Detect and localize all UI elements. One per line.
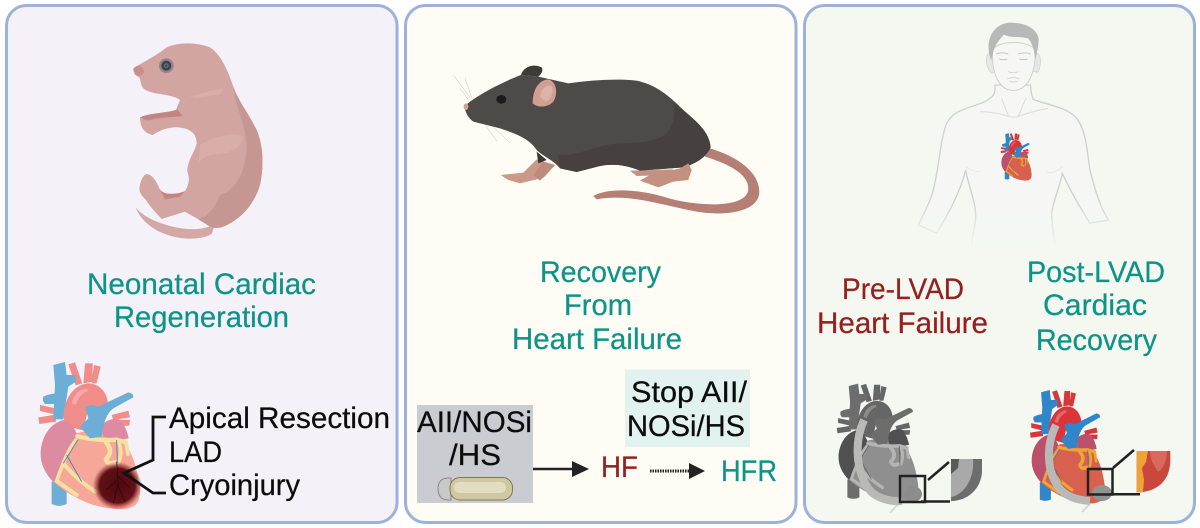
treatment box: AII/NOSi/HS bbox=[417, 405, 533, 503]
near hind leg bbox=[640, 163, 692, 187]
LVAD pump bbox=[904, 486, 922, 502]
magnified wall bbox=[951, 459, 982, 501]
arrow: treatment to HF bbox=[533, 461, 589, 477]
heading: post-LVAD cardiac recovery: Cardiac bbox=[1043, 289, 1147, 322]
heading: neonatal cardiac regeneration: Neonatal Cardiac bbox=[87, 268, 316, 301]
callout: stop treatment: NOSi/HS bbox=[627, 410, 745, 443]
driveline bbox=[1082, 504, 1090, 512]
magnifier box bbox=[1088, 469, 1112, 494]
panel: post-LVAD cardiac recovery bbox=[804, 6, 1194, 522]
LVAD pump bbox=[1092, 485, 1112, 501]
heading: pre-LVAD heart failure: Pre-LVAD bbox=[842, 273, 964, 306]
callout: stop treatment bbox=[625, 370, 750, 447]
treatment box: AII/NOSi/HS: AII/NOSi bbox=[417, 406, 532, 439]
LVAD tube bbox=[1049, 425, 1090, 501]
body bbox=[464, 75, 711, 172]
heading: recovery from heart failure bbox=[512, 256, 682, 356]
rear far foot bbox=[630, 169, 673, 176]
treatment box: AII/NOSi/HS: /HS bbox=[449, 439, 501, 472]
whiskers bbox=[453, 75, 511, 143]
icon: heart in chest bbox=[1001, 133, 1032, 181]
ears bbox=[521, 66, 542, 77]
icon: human torso bbox=[913, 23, 1113, 250]
arrow: dotted HF to HFR bbox=[650, 463, 705, 479]
icon: injured heart bbox=[38, 362, 142, 510]
heading: pre-LVAD heart failure: Heart Failure bbox=[817, 307, 988, 340]
label: HFR: HFR bbox=[721, 455, 777, 488]
magnified wall bbox=[1137, 451, 1170, 492]
heading: neonatal cardiac regeneration bbox=[87, 268, 316, 334]
labels: injury models: LAD bbox=[169, 436, 222, 469]
front legs bbox=[501, 159, 555, 183]
panel: neonatal cardiac regeneration bbox=[6, 6, 397, 522]
icon: adult mouse bbox=[453, 66, 759, 213]
callout: stop treatment: Stop AII/ bbox=[631, 376, 748, 409]
heading: recovery from heart failure: From bbox=[564, 289, 632, 322]
label: HF: HF bbox=[601, 451, 638, 484]
heading: post-LVAD cardiac recovery bbox=[1027, 256, 1165, 357]
body shading bbox=[558, 103, 711, 172]
labels: injury models: Cryoinjury bbox=[169, 469, 300, 502]
icon: capsule bbox=[438, 478, 512, 500]
tail bbox=[593, 147, 759, 213]
callout lines: injury labels bbox=[124, 417, 166, 493]
heading: recovery from heart failure: Recovery bbox=[540, 256, 661, 289]
heading: pre-LVAD heart failure bbox=[817, 273, 988, 340]
magnifier box bbox=[900, 476, 925, 502]
heading: neonatal cardiac regeneration: Regeneration bbox=[114, 301, 289, 334]
eye and nose bbox=[496, 95, 506, 104]
LVAD tube bbox=[858, 420, 902, 501]
icon: recovered heart with LVAD (colour) bbox=[1030, 390, 1170, 512]
heading: post-LVAD cardiac recovery: Recovery bbox=[1036, 324, 1157, 357]
driveline bbox=[890, 502, 900, 513]
icon: neonatal mouse pup bbox=[133, 43, 263, 239]
heading: recovery from heart failure: Heart Failure bbox=[512, 323, 682, 356]
labels: injury models bbox=[169, 402, 390, 502]
heading: post-LVAD cardiac recovery: Post-LVAD bbox=[1027, 256, 1165, 289]
labels: injury models: Apical Resection bbox=[169, 402, 390, 435]
panel: recovery from heart failure bbox=[406, 6, 796, 522]
icon: failing heart with LVAD (greyscale) bbox=[837, 384, 982, 513]
